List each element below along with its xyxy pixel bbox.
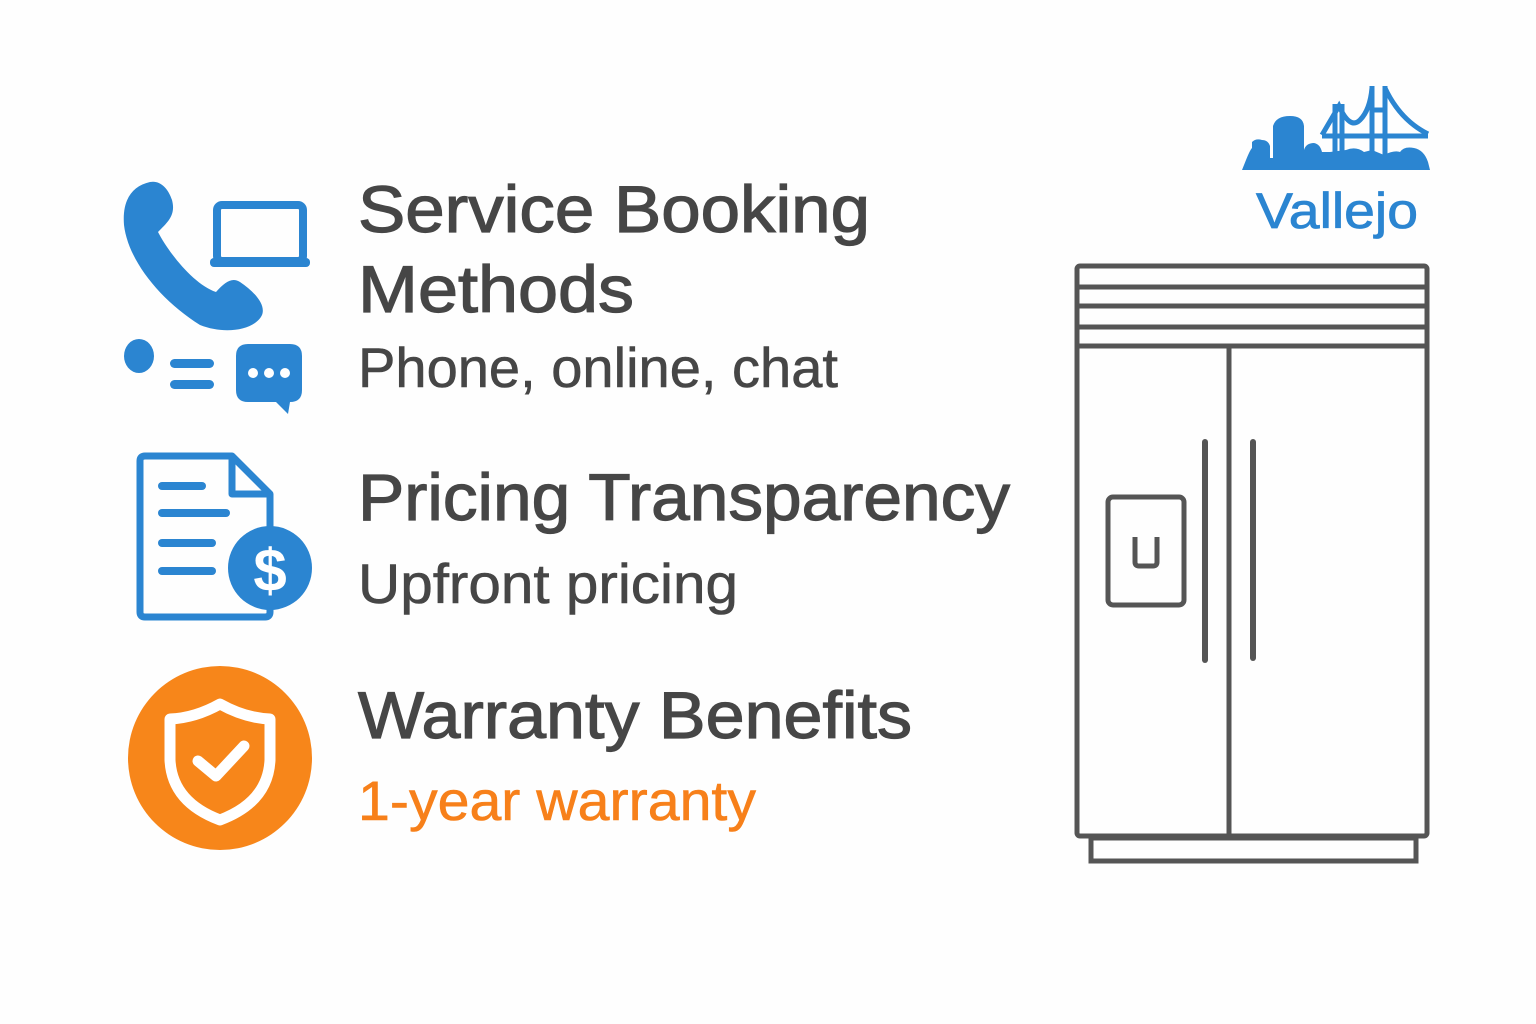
icon: laptop (210, 205, 310, 267)
logo text: vallejo: Vallejo (1256, 183, 1418, 239)
icon: dollar coin (228, 526, 312, 610)
icon: phone, laptop and chat (124, 182, 310, 414)
fridge: water dispenser (1108, 497, 1184, 605)
text: 1-year warranty: 1-year warranty (358, 769, 756, 832)
icon: phone handset (124, 182, 263, 330)
heading: methods: Methods (358, 252, 634, 326)
heading: warranty benefits: Warranty Benefits (358, 678, 912, 752)
icon: chat bubble (236, 344, 302, 414)
logo: vallejo skyline (1242, 86, 1430, 170)
heading: pricing transparency: Pricing Transparency (358, 460, 1010, 534)
illustration: refrigerator (1077, 266, 1427, 861)
heading: service booking: Service Booking (358, 172, 870, 246)
icon: dot and lines (124, 339, 214, 389)
icon: pricing document (140, 456, 312, 617)
icon: dollar coin: $ (253, 537, 287, 604)
text: upfront pricing: Upfront pricing (358, 552, 738, 615)
text: phone online chat: Phone, online, chat (358, 336, 838, 399)
icon: warranty shield (128, 666, 312, 850)
